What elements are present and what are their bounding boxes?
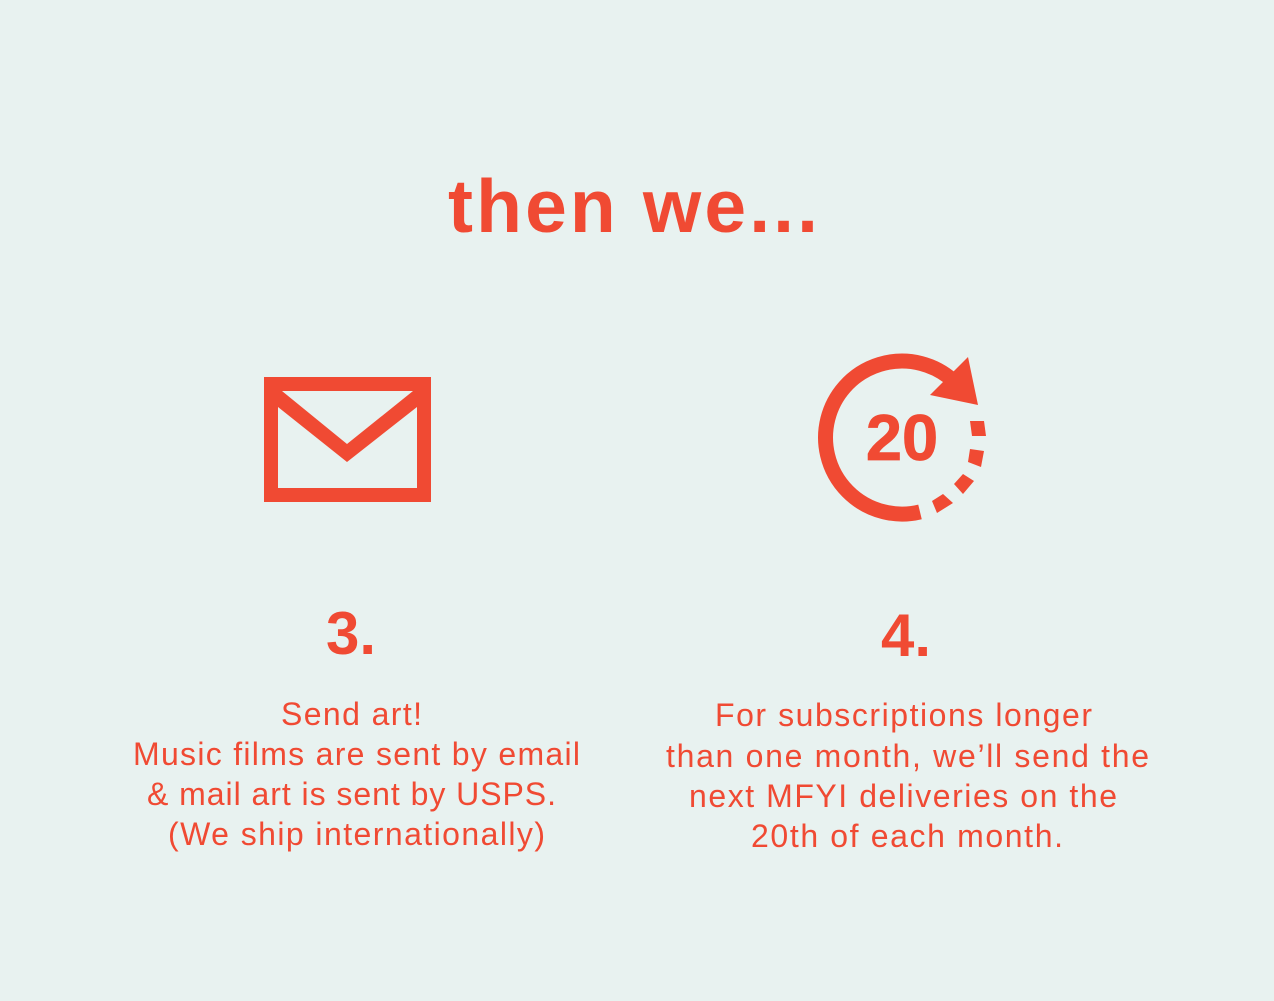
text block: step 4 description: 20th of each month. xyxy=(751,818,1063,854)
text block: step 3 description: Music films are sent by email xyxy=(133,736,580,772)
step number 4: 4. xyxy=(881,602,931,669)
text block: step 3 description: & mail art is sent by USPS. xyxy=(147,776,556,812)
panel: step 3 xyxy=(133,377,580,852)
step number 3: 3. xyxy=(326,600,376,667)
icon: 20 day cycle arrow: 20 xyxy=(866,401,938,474)
text block: step 4 description xyxy=(666,697,1149,854)
title: then we... xyxy=(448,164,818,248)
text block: step 4 description: For subscriptions longer xyxy=(715,697,1092,733)
text block: step 3 description: (We ship internationally) xyxy=(168,816,545,852)
text block: step 4 description: than one month, we’ll send the xyxy=(666,738,1149,774)
panel: step 4 xyxy=(666,357,1149,854)
text block: step 3 description: Send art! xyxy=(281,696,422,732)
icon: envelope xyxy=(264,377,431,502)
text block: step 4 description: next MFYI deliveries on the xyxy=(689,778,1117,814)
text block: step 3 description xyxy=(133,696,580,852)
icon: 20 day cycle arrow xyxy=(826,357,986,514)
